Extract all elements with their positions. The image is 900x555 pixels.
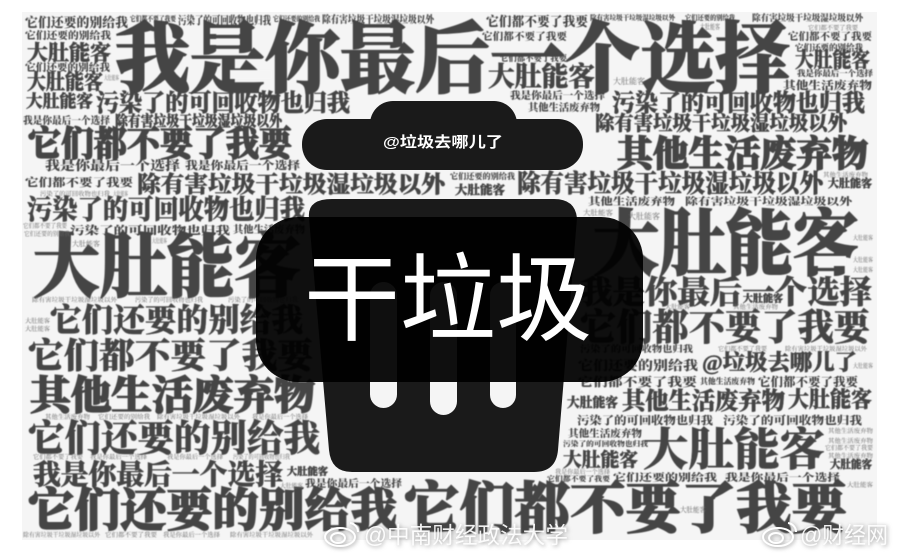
medium words: 大肚能客 xyxy=(27,41,111,65)
smaller words: 它们还要的别给我 xyxy=(450,171,515,181)
big word: 它们都不要了我要 upper left: 它们都不要了我要 xyxy=(28,125,294,164)
smaller words: 污染了的可回收物也归我 xyxy=(178,13,271,27)
tiny filler words: 大肚能客 xyxy=(847,481,873,489)
medium words: 它们都不要了我要 xyxy=(580,307,872,349)
tiny filler words: 大肚能客 xyxy=(25,317,50,325)
medium words: 除有害垃圾干垃圾湿垃圾以外 xyxy=(517,169,826,198)
tiny filler words: 除有害垃圾干垃圾湿垃圾以外 xyxy=(157,413,241,421)
smaller words: 其他生活废弃物 xyxy=(783,78,872,92)
medium words: 除有害垃圾干垃圾湿垃圾以外 xyxy=(115,112,284,130)
tiny filler words: 大肚能客 xyxy=(25,325,50,333)
banner title: 干垃圾: 干垃圾 xyxy=(304,247,592,354)
tiny filler words: 大肚能客 xyxy=(613,76,645,86)
big word: 大肚能客 left: 大肚能客 xyxy=(33,228,301,307)
tiny filler words: 除有害垃圾干垃圾湿垃圾以外 xyxy=(785,345,868,353)
bin slot right xyxy=(490,282,516,408)
tiny filler words: 我是你最后一个选择 xyxy=(167,453,223,461)
smaller words: 除有害垃圾干垃圾湿垃圾以外 xyxy=(752,12,864,23)
smaller words: 其他生活废弃物 xyxy=(528,101,600,114)
smaller words: 它们还要的别给我 xyxy=(25,15,128,30)
smaller words: 我是你最后一个选择 xyxy=(305,477,402,490)
tiny filler words: 除有害垃圾干垃圾湿垃圾以外 xyxy=(230,531,314,539)
tiny filler words: 大肚能客 xyxy=(628,211,660,221)
bin lid xyxy=(302,119,583,170)
lid handle text: @垃圾去哪儿了 xyxy=(383,133,503,151)
smaller words: 它们都不要了我要 xyxy=(130,14,177,23)
smaller words: 其他生活废弃物 xyxy=(568,427,642,440)
big word: 其他生活废弃物 upper right: 其他生活废弃物 xyxy=(617,134,868,174)
tiny filler words: 除有害垃圾干垃圾湿垃圾以外 xyxy=(23,531,101,539)
tiny filler words: 大肚能客 xyxy=(665,303,690,311)
tiny filler words: 它们还要的别给我 xyxy=(98,413,150,421)
big word: 它们还要的别给我 bottom: 它们还要的别给我 xyxy=(28,485,397,536)
tiny filler words: 它们都不要了我要 xyxy=(808,24,858,32)
medium words: 大肚能客 xyxy=(567,395,618,410)
medium words: 大肚能客 xyxy=(643,424,825,475)
smaller words: 我是你最后一个选择 xyxy=(185,158,300,172)
tiny filler words: 我是你最后一个选择 xyxy=(163,531,220,539)
tiny filler words: 大肚能客 xyxy=(680,505,706,514)
watermark: 中南财经政法大学 xyxy=(325,522,568,548)
bin slot left xyxy=(370,282,397,408)
tiny filler words: 污染了的可回收物也归我 xyxy=(135,296,203,304)
medium words: 污染了的可回收物也归我 xyxy=(96,89,350,117)
tiny filler words: 其他生活废弃物 xyxy=(823,171,868,179)
smaller words: 污染了的可回收物也归我 xyxy=(563,439,648,448)
tiny filler words: 大肚能客 xyxy=(700,22,720,31)
tiny filler words: 大肚能客 xyxy=(853,234,873,242)
big word: 其他生活废弃物 lower left: 其他生活废弃物 xyxy=(30,373,315,418)
tiny filler words: 我是你最后一个选择 xyxy=(555,468,610,476)
medium words: 它们都不要了我要 xyxy=(28,337,315,376)
medium words: 大肚能客 xyxy=(795,48,870,72)
medium words: 大肚能客 xyxy=(455,182,505,197)
medium words: 我是你最后一个选择 xyxy=(33,458,283,491)
smaller words: 它们都不要了我要 xyxy=(482,30,568,43)
medium words: 它们还要的别给我 xyxy=(28,418,320,460)
tiny filler words: 其他生活废弃物 xyxy=(733,303,778,311)
medium words: 除有害垃圾干垃圾湿垃圾以外 xyxy=(595,111,850,135)
smaller words: 除有害垃圾干垃圾湿垃圾以外 xyxy=(685,195,855,208)
medium words: 大肚能客 xyxy=(287,465,328,478)
watermark text left: @中南财经政法大学 xyxy=(364,522,568,548)
smaller words: 它们都不要了我要 xyxy=(758,374,859,389)
tiny filler words: 大肚能客 xyxy=(113,190,128,198)
smaller words: 污染了的可回收物也归我 xyxy=(70,223,230,237)
tiny filler words: 它们都不要了我要 xyxy=(33,453,83,461)
tiny filler words: 它们都不要了我要 xyxy=(23,222,67,230)
smaller words: 污染了的可回收物也归我 xyxy=(580,343,693,354)
smaller words: 它们还要的别给我 xyxy=(273,14,320,23)
icon: trash bin xyxy=(302,101,583,472)
tiny filler words: 污染了的可回收物也归我 xyxy=(228,296,298,304)
tiny filler words: 大肚能客 xyxy=(853,362,873,370)
tiny filler words: 其他生活废弃物 xyxy=(828,427,873,435)
tiny filler words: 污染了的可回收物也归我 xyxy=(233,453,290,461)
medium words: 大肚能客 xyxy=(743,292,783,305)
smaller words: 它们都不要了我要 xyxy=(578,374,698,389)
big word: 大肚能客 right: 大肚能客 xyxy=(593,205,859,285)
tiny filler words: 其他生活废弃物 xyxy=(828,452,873,460)
smaller words: 它们都不要了我要 xyxy=(788,30,873,43)
medium words: 污染了的可回收物也归我 xyxy=(27,194,305,225)
smaller words: 它们都不要了我要 xyxy=(500,53,568,63)
smaller words: 其他生活废弃物 xyxy=(700,376,755,386)
tiny filler words: 我是你最后一个选择 xyxy=(252,413,308,421)
smaller words: 它们还要的别给我 xyxy=(25,61,110,74)
smaller words: 它们还要的别给我 xyxy=(685,13,735,22)
medium words: 大肚能客 xyxy=(488,61,595,92)
smaller words: 我是你最后一个选择 xyxy=(510,89,605,102)
smaller words: 它们还要的别给我 xyxy=(25,29,111,42)
tiny filler words: 它们都不要了我要 xyxy=(718,345,767,353)
smaller words: 它们还要的别给我 xyxy=(613,471,717,484)
smaller words: 我是你最后一个选择 xyxy=(797,68,873,78)
tiny filler words: 大肚能客 xyxy=(104,74,119,82)
big word: 我是你最后一个选择: 我是你最后一个选择 xyxy=(115,16,790,103)
smaller words: 除有害垃圾干垃圾湿垃圾以外 xyxy=(590,13,676,22)
smaller words: 它们都不要了我要 xyxy=(25,175,134,189)
tiny filler words: 大肚能客 xyxy=(583,208,613,217)
medium words: 大肚能客 xyxy=(788,387,872,412)
tiny filler words: 大肚能客 xyxy=(152,237,167,245)
medium words: 大肚能客 xyxy=(26,91,93,111)
tiny filler words: 大肚能客 xyxy=(72,239,100,248)
medium words: 除有害垃圾干垃圾湿垃圾以外 xyxy=(137,171,448,197)
tiny filler words: 它们还要的别给我 xyxy=(24,230,70,238)
tiny filler words: 污染了的可回收物也归我 xyxy=(40,190,110,198)
medium words: 大肚能客 xyxy=(830,457,872,471)
icon: weibo logo left xyxy=(325,523,358,546)
smaller words: 其他生活废弃物 xyxy=(233,223,305,236)
smaller words: 除有害垃圾干垃圾湿垃圾以外 xyxy=(322,13,436,26)
medium words: 大肚能客 xyxy=(27,70,103,94)
bin lid handle xyxy=(370,101,517,151)
icon: weibo logo right xyxy=(763,523,796,546)
smaller words: 其他生活废弃物 xyxy=(588,195,675,208)
big word: 它们都不要了我要 bottom: 它们都不要了我要 xyxy=(404,479,850,541)
smaller words: 它们还要的别给我 xyxy=(795,42,863,53)
medium words: 我是你最后一个选择 xyxy=(580,274,872,310)
medium words: 大肚能客 xyxy=(828,176,872,190)
medium words: 其他生活废弃物 xyxy=(622,387,785,415)
smaller words: 我是你最后一个选择 xyxy=(725,471,840,484)
medium words: 污染了的可回收物也归我 xyxy=(612,89,865,117)
medium words: @垃圾去哪儿了 xyxy=(702,350,857,375)
smaller words: 污染了的可回收物也归我 xyxy=(723,413,862,427)
tiny filler words: 大肚能客 xyxy=(280,482,303,490)
tiny filler words: 大肚能客 xyxy=(853,266,873,274)
tiny filler words: 它们都不要了我要 xyxy=(825,444,873,452)
tiny filler words: 除有害垃圾干垃圾湿垃圾以外 xyxy=(32,296,118,304)
medium words: 大肚能客 xyxy=(563,448,638,471)
tiny filler words: 其他生活废弃物 xyxy=(45,413,90,421)
small word boxes inside big glyphs xyxy=(210,28,846,266)
medium words: 它们还要的别给我 xyxy=(50,302,303,338)
watermark: 财经网 xyxy=(763,522,888,548)
smaller words: 它们还要的别给我 xyxy=(578,358,698,373)
smaller words: 它们都不要了我要 xyxy=(547,474,611,483)
medium words xyxy=(26,41,872,491)
smaller words: 它们都不要了我要 xyxy=(486,14,589,29)
smaller words: 我是你最后一个选择 xyxy=(45,158,180,173)
tiny filler words: 我是你最后一个选择 xyxy=(90,453,147,461)
watermark text right: @财经网 xyxy=(800,522,888,548)
tiny filler words: 大肚能客 xyxy=(853,256,873,264)
tiny filler words: 它们都不要了我要 xyxy=(105,531,157,539)
bin slot middle xyxy=(430,282,457,415)
smaller words: 我是你最后一个选择 xyxy=(23,114,110,127)
smaller words: 污染了的可回收物也归我 xyxy=(577,413,713,427)
black banner xyxy=(256,217,643,382)
tiny filler words: 其他生活废弃物 xyxy=(828,437,873,445)
bin body xyxy=(309,199,577,472)
